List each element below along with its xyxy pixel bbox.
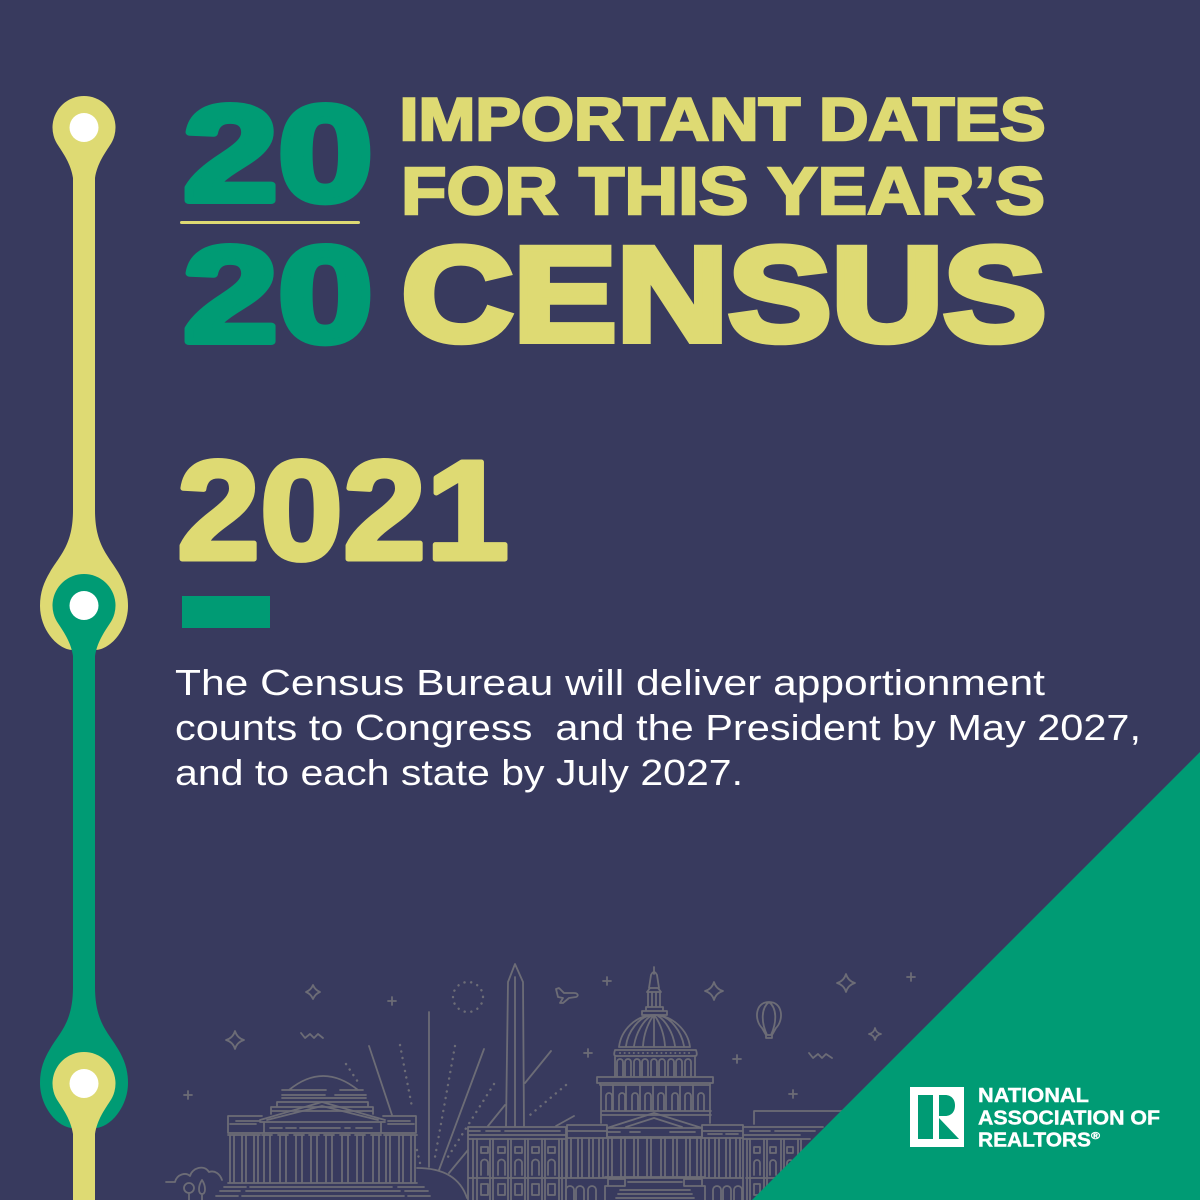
central portico [605, 1113, 704, 1177]
building: Washington Monument [506, 964, 524, 1126]
sky decorations: stars [184, 973, 915, 1099]
white dot top [70, 113, 98, 142]
logo wordmark [978, 1084, 1160, 1152]
timeline node: lower yellow pin [53, 1052, 116, 1200]
white dot middle [70, 591, 98, 620]
logo wordmark: NATIONAL [978, 1084, 1089, 1107]
body text: counts to Congress and the President by May 2027, [175, 707, 1141, 748]
side wings [565, 1125, 743, 1200]
body text: and to each state by July 2027. [175, 752, 743, 793]
year heading: 2021 [177, 431, 509, 589]
left block with windows [468, 1127, 566, 1200]
yellow stem with teardrop node [40, 170, 128, 650]
title [400, 86, 1046, 370]
timeline connector: green teardrop node [40, 987, 128, 1128]
white dot lower [70, 1069, 98, 1098]
logo wordmark: ® [1091, 1131, 1101, 1142]
building: US Capitol [468, 967, 843, 1200]
logo wordmark: ASSOCIATION OF [978, 1106, 1160, 1130]
logo wordmark: REALTORS [978, 1128, 1091, 1152]
icon: hot air balloon [757, 1002, 781, 1038]
divider line [180, 221, 360, 224]
dome [614, 1015, 697, 1056]
green stem [52, 574, 116, 995]
title line 2: FOR THIS YEAR’S [401, 154, 1045, 229]
skyline illustration [166, 964, 915, 1200]
accent bar [182, 596, 270, 628]
numeral 20 lower: 20 [183, 218, 373, 370]
timeline connector: yellow top pin and stem [40, 96, 128, 650]
green corner triangle [752, 752, 1200, 1200]
central stairs [605, 1179, 705, 1200]
numeral 20 upper: 20 [183, 78, 373, 230]
body text: The Census Bureau will deliver apportionment [175, 662, 1045, 703]
statue and lantern [642, 967, 667, 1015]
lower drum [601, 1085, 711, 1123]
icon: airplane [556, 988, 578, 1003]
building: Jefferson Memorial [216, 1076, 430, 1196]
trees [166, 1168, 222, 1200]
title line 1: IMPORTANT DATES [400, 86, 1046, 153]
yellow pin head [53, 96, 116, 178]
2020 logo [180, 78, 373, 370]
logo: National Association of Realtors [910, 1084, 1160, 1152]
body text [175, 662, 1141, 793]
right block with windows [743, 1111, 843, 1200]
icon: R block mark [910, 1087, 964, 1147]
drum colonnade [597, 1057, 713, 1085]
yellow stem lower [53, 1052, 116, 1200]
sun and rays [346, 982, 574, 1198]
timeline node: 2021 green pin [52, 574, 116, 995]
title line 3: CENSUS [402, 220, 1046, 370]
